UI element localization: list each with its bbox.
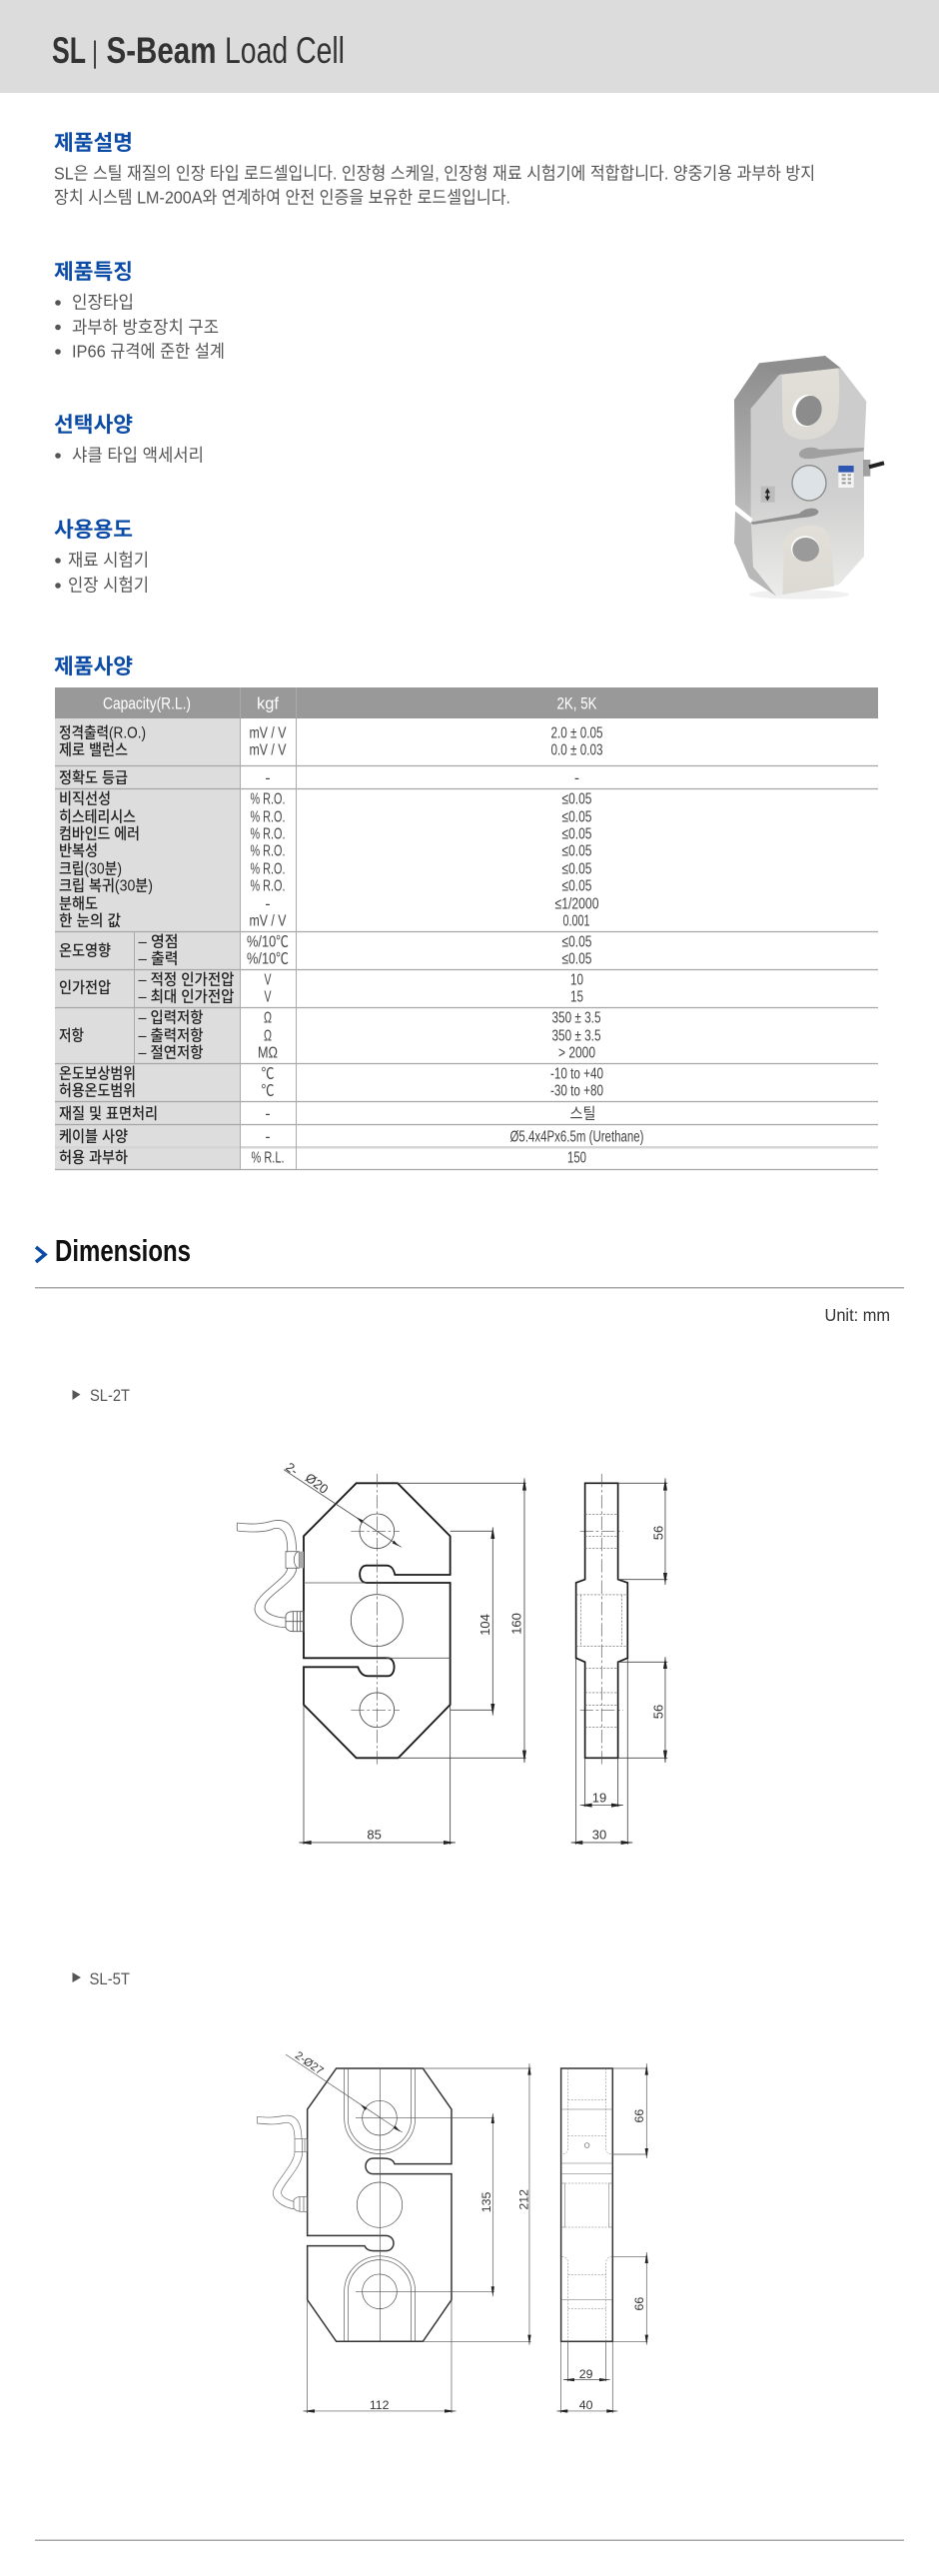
section: product description: 장치 시스템 LM-200A와 연계하여 안전 인증을 보유한 로드셀입니다.	[54, 188, 510, 208]
unit column: % R.O.	[250, 877, 286, 895]
unit column: MΩ	[258, 1045, 278, 1061]
unit column: % R.O.	[250, 825, 286, 843]
value column: ≤0.05	[561, 825, 591, 843]
row labels: 인가전압	[59, 979, 111, 997]
value column: 15	[570, 989, 583, 1005]
dimension numbers: 160	[509, 1613, 524, 1635]
row labels: – 적정 인가전압	[138, 971, 234, 989]
unit column: -	[265, 895, 271, 913]
row labels: 정확도 등급	[59, 769, 128, 787]
section: features: 인장타입	[72, 292, 134, 312]
section: features: 과부하 방호장치 구조	[72, 318, 219, 338]
section: applications: 인장 시험기	[68, 576, 149, 596]
row labels: 허용 과부하	[59, 1149, 128, 1167]
table header: Capacity(R.L.)	[103, 693, 191, 713]
unit note: Unit: mm	[825, 1305, 890, 1325]
unit column: % R.O.	[250, 861, 286, 877]
dimension numbers: 66	[632, 2297, 646, 2310]
cable and clamps	[257, 2115, 303, 2209]
unit column: % R.O.	[250, 809, 286, 825]
row labels: 정격출력(R.O.)	[59, 723, 146, 741]
unit column: -	[265, 1105, 271, 1123]
unit column: mV / V	[250, 725, 287, 741]
section: applications: 재료 시험기	[68, 550, 149, 570]
unit column: -	[265, 1129, 271, 1145]
title	[52, 30, 345, 71]
arrowheads	[303, 2064, 648, 2413]
arrowheads	[299, 1478, 667, 1845]
row labels: 한 눈의 값	[59, 911, 121, 929]
dimension numbers: 19	[592, 1791, 606, 1806]
value column: ≤0.05	[561, 951, 591, 967]
section: features: IP66 규격에 준한 설계	[72, 342, 225, 362]
drawing: SL-2T dimensions	[237, 1459, 667, 1845]
row labels: 제로 밸런스	[59, 741, 128, 759]
value column: ≤0.05	[561, 877, 591, 895]
unit column: -	[265, 769, 271, 787]
cable and clamps	[237, 1520, 297, 1628]
table header: 2K, 5K	[557, 693, 597, 713]
value column: -10 to +40	[550, 1065, 603, 1083]
value column	[509, 725, 643, 1167]
unit column: Ω	[264, 1009, 272, 1027]
row labels: 컴바인드 에러	[59, 825, 140, 843]
section: applications	[54, 519, 149, 596]
section: applications: 사용용도	[54, 519, 133, 542]
value column: ≤0.05	[561, 861, 591, 877]
unit column: % R.O.	[250, 843, 286, 859]
dimension numbers: 212	[516, 2189, 530, 2210]
dimension lines	[284, 1470, 667, 1845]
dimension numbers: 56	[650, 1705, 665, 1719]
row labels: 비직선성	[59, 789, 111, 807]
unit column	[247, 725, 289, 1167]
title: |	[93, 36, 97, 69]
row labels: 히스테리시스	[59, 807, 136, 825]
title: SL	[52, 30, 86, 71]
row labels: – 출력	[138, 949, 178, 967]
section: product description: SL은 스틸 재질의 인장 타입 로드셀입니다. 인장형 스케일, 인장형 재료 시험기에 적합합니다. 양중기용 과부하 방지	[54, 164, 815, 184]
dimension numbers: 40	[579, 2398, 593, 2412]
label: SL-2T: SL-2T	[90, 1387, 130, 1405]
value column: -	[574, 769, 579, 787]
unit column: mV / V	[250, 913, 287, 929]
dimension numbers: 56	[650, 1526, 665, 1540]
section: options: 선택사양	[54, 414, 133, 437]
dimension numbers: 66	[632, 2109, 646, 2123]
row labels: – 최대 인가전압	[138, 987, 234, 1005]
section: product description: 제품설명	[54, 132, 133, 155]
row labels: – 절연저항	[138, 1043, 204, 1061]
row labels: – 출력저항	[138, 1027, 204, 1045]
section: options: 샤클 타입 액세서리	[72, 446, 204, 466]
row labels: 케이블 사양	[59, 1127, 128, 1145]
side view	[561, 2068, 612, 2341]
unit column: ℃	[262, 1083, 274, 1099]
dimension numbers: 2-	[283, 1459, 301, 1478]
value column: -30 to +80	[550, 1083, 603, 1099]
value column: 0.001	[563, 913, 589, 929]
label: SL-5T: SL-5T	[90, 1970, 130, 1988]
value column: ≤0.05	[561, 933, 591, 951]
value column: 0.0 ± 0.03	[551, 741, 603, 759]
table header	[103, 693, 597, 713]
unit column: %/10℃	[247, 933, 289, 951]
value column: ≤1/2000	[555, 895, 599, 913]
unit column: ℃	[262, 1065, 274, 1083]
title: Load Cell	[225, 30, 345, 71]
dimension numbers: 104	[477, 1614, 492, 1636]
unit column: % R.L.	[252, 1149, 284, 1167]
row labels: 온도영향	[59, 941, 111, 959]
row labels: 크립(30분)	[59, 859, 122, 877]
section: features	[54, 261, 225, 362]
value column: 350 ± 3.5	[551, 1027, 601, 1045]
side view	[576, 1483, 627, 1758]
drawing: SL-5T dimensions	[257, 2049, 648, 2413]
value column: 2.0 ± 0.05	[551, 725, 603, 741]
dimension numbers: 2-Ø27	[293, 2049, 326, 2077]
dimension numbers	[283, 1459, 665, 1843]
header band	[0, 0, 939, 93]
unit column: Ω	[264, 1027, 272, 1045]
specification table	[55, 687, 878, 1169]
row labels: 허용온도범위	[59, 1081, 136, 1099]
shackle plates	[345, 2068, 416, 2341]
product photo: load cell	[732, 356, 884, 600]
row labels	[59, 723, 234, 1167]
table header: kgf	[257, 693, 279, 713]
table background and rules	[55, 687, 878, 1169]
unit column: V	[264, 971, 272, 989]
unit column: %/10℃	[247, 951, 289, 967]
row labels: 분해도	[59, 895, 98, 913]
row labels: 반복성	[59, 841, 98, 859]
front view outline	[304, 1483, 451, 1758]
section: product description	[54, 132, 815, 208]
row labels: 재질 및 표면처리	[59, 1105, 158, 1123]
dimension numbers: 112	[370, 2398, 390, 2412]
dimension numbers: 29	[579, 2367, 593, 2381]
row labels: 크립 복귀(30분)	[59, 877, 153, 895]
unit column: % R.O.	[250, 791, 286, 807]
centre lines	[376, 1474, 378, 1767]
value column: ≤0.05	[561, 809, 591, 825]
value column: ≤0.05	[561, 843, 591, 859]
row labels: – 영점	[138, 933, 178, 951]
title: S-Beam	[106, 30, 216, 71]
label: SL-2T	[72, 1387, 130, 1405]
section: features: 제품특징	[54, 261, 133, 284]
section: options	[54, 414, 204, 466]
value column: 150	[567, 1149, 586, 1167]
centre lines	[356, 2068, 494, 2341]
heading: dimensions: Dimensions	[55, 1233, 191, 1268]
dimension numbers: 30	[592, 1828, 606, 1843]
value column: Ø5.4x4Px6.5m (Urethane)	[509, 1129, 643, 1145]
dimension numbers: Ø20	[303, 1470, 331, 1497]
row labels: 온도보상범위	[59, 1065, 136, 1083]
heading: dimensions	[36, 1233, 191, 1268]
row labels: – 입력저항	[138, 1009, 204, 1027]
dimension numbers: 135	[479, 2192, 493, 2212]
bottom rule	[35, 2540, 904, 2541]
dimension numbers	[293, 2049, 646, 2412]
unit column: mV / V	[250, 741, 287, 759]
dimension lines	[286, 2054, 647, 2413]
heading: specifications: 제품사양	[54, 655, 133, 678]
value column: > 2000	[558, 1045, 595, 1061]
front view outline	[308, 2068, 452, 2341]
row labels: 저항	[59, 1027, 84, 1045]
value column: 350 ± 3.5	[551, 1009, 601, 1027]
value column: ≤0.05	[561, 791, 591, 807]
value column: 스틸	[569, 1105, 595, 1123]
dimension numbers: 85	[367, 1828, 382, 1843]
label: SL-5T	[72, 1970, 130, 1988]
value column: 10	[570, 971, 583, 989]
unit column: V	[264, 989, 272, 1005]
